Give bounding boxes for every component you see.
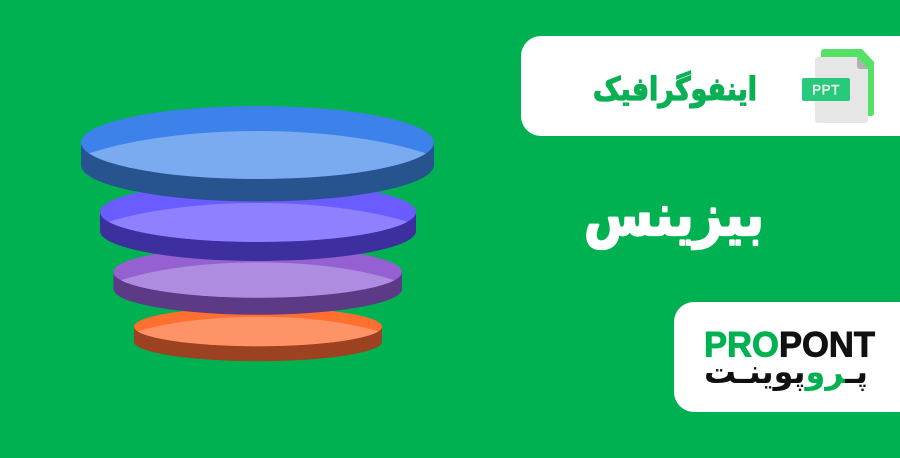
icon: PPT file: PPT <box>812 82 840 98</box>
heading: business: بیزینس <box>584 181 764 250</box>
icon: PPT file <box>802 49 874 123</box>
logo wordmark: PROPONT: PROPONT <box>704 326 875 364</box>
funnel chart: stacked discs <box>81 106 434 362</box>
disc 4: orange <box>134 311 382 362</box>
disc 3: violet <box>113 254 402 315</box>
disc 1: blue <box>81 106 434 202</box>
logo wordmark: Persian: پـروپوینـت <box>704 352 868 392</box>
disc 2: indigo <box>100 192 416 261</box>
panel: logo <box>674 302 900 412</box>
panel: infographic header <box>521 36 900 136</box>
heading: infographic: اینفوگرافیک <box>593 70 757 108</box>
